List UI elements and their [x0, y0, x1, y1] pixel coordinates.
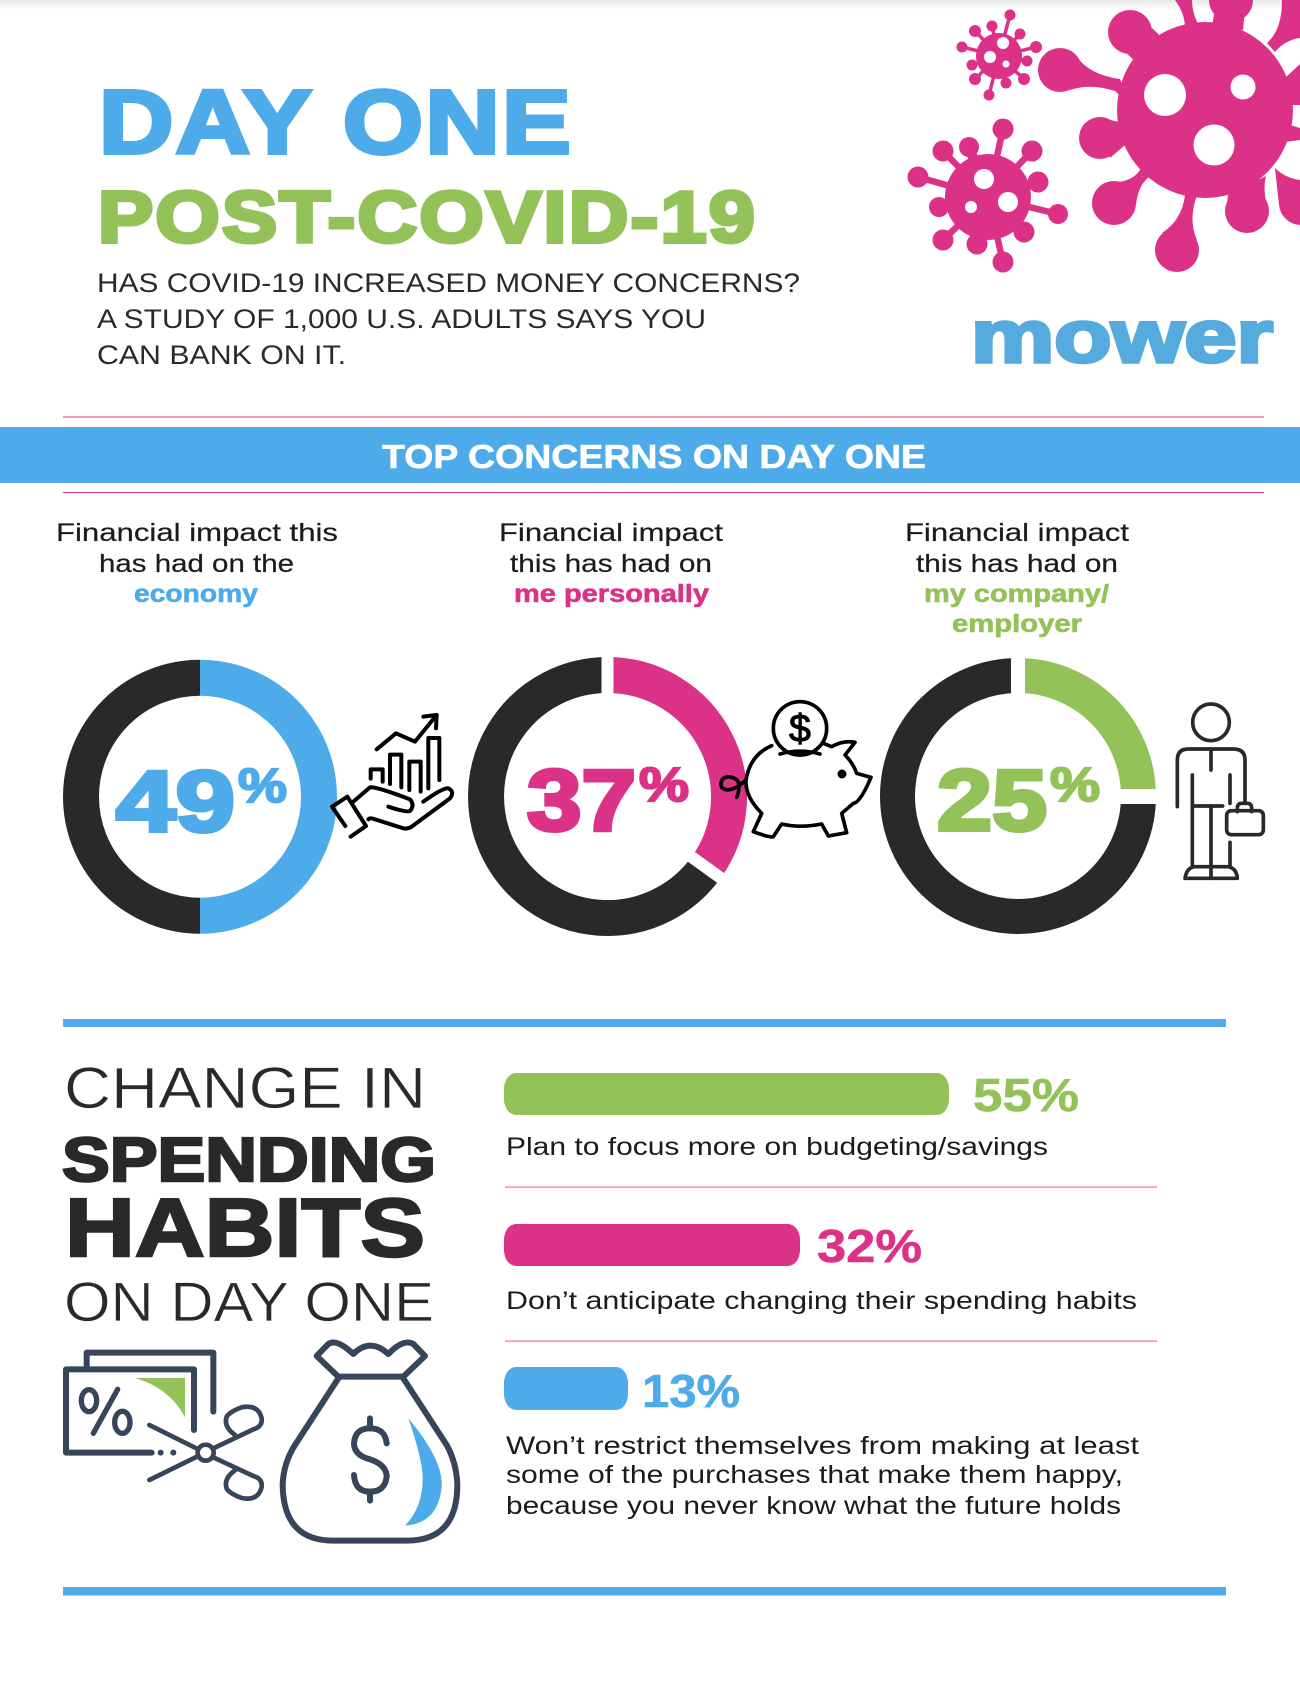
stat: 55% budgeting: Plan to focus more on budgeting/savings: [506, 1133, 1048, 1161]
text: employer label: Financial impact: [905, 519, 1129, 547]
icon: piggy bank: $: [789, 707, 811, 751]
section banner: top concerns: TOP CONCERNS ON DAY ONE: [382, 438, 926, 475]
logo: mower: mower: [971, 295, 1273, 378]
donut chart: 25%: 25: [937, 753, 1047, 849]
icon: piggy bank: [721, 702, 871, 837]
text: economy label: [56, 519, 338, 608]
divider: bottom of spending section: [63, 1587, 1226, 1596]
divider: top of spending section: [63, 1019, 1226, 1027]
text: personal label: Financial impact: [499, 519, 723, 547]
stat: 32% no change: 32%: [817, 1220, 922, 1272]
stat: 55% budgeting: [504, 1069, 1079, 1161]
text: personal label: this has had on: [510, 550, 712, 578]
icon: businessperson with briefcase: [1177, 704, 1263, 878]
donut chart: 37%: %: [639, 759, 689, 812]
text: economy label: Financial impact this: [56, 519, 338, 547]
heading: change in spending habits: ON DAY ONE: [64, 1270, 434, 1333]
icon: small virus top: [956, 10, 1042, 100]
text: employer label: [905, 519, 1129, 638]
donut chart: 49%: [81, 678, 319, 916]
text: personal label: me personally: [514, 580, 709, 608]
title: POST-COVID-19: [98, 178, 757, 258]
panel: employer concern: [898, 519, 1263, 916]
text: economy label: has had on the: [99, 550, 294, 578]
stat: 55% budgeting: 55%: [973, 1069, 1079, 1121]
subtitle: HAS COVID-19 INCREASED MONEY CONCERNS?: [97, 268, 800, 298]
stat: 13% no restriction: because you never know what the future holds: [506, 1492, 1121, 1520]
icon: money bag: [283, 1342, 457, 1541]
text: employer label: this has had on: [916, 550, 1118, 578]
icon: hand with growth chart: [332, 715, 452, 837]
heading: change in spending habits: SPENDING: [62, 1126, 436, 1195]
text: economy label: economy: [134, 580, 258, 608]
stat: 13% no restriction: [504, 1365, 1139, 1520]
donut chart: 37%: 37: [527, 753, 636, 849]
subtitle: CAN BANK ON IT.: [97, 340, 346, 370]
heading: change in spending habits: HABITS: [65, 1181, 425, 1274]
text: employer label: employer: [952, 610, 1082, 638]
heading: change in spending habits: CHANGE IN: [64, 1056, 426, 1121]
donut chart: 25%: %: [1050, 759, 1100, 812]
subtitle: A STUDY OF 1,000 U.S. ADULTS SAYS YOU: [97, 304, 706, 334]
title: DAY ONE: [99, 73, 573, 173]
text: employer label: my company/: [924, 580, 1109, 608]
donut chart: 49%: %: [238, 760, 287, 813]
stat: 32% no change: [504, 1220, 1137, 1315]
donut chart: 25%: [898, 640, 1170, 916]
donut chart: 49%: 49: [116, 754, 235, 850]
icon: coupon and scissors: [66, 1353, 262, 1499]
stat: 13% no restriction: some of the purchases that make them happy,: [506, 1461, 1123, 1489]
icon: medium virus: [908, 118, 1068, 272]
panel: economy concern: [56, 519, 452, 916]
heading: change in spending habits: [62, 1056, 436, 1333]
donut chart: 37%: [486, 640, 729, 918]
stat: 32% no change: Don’t anticipate changing their spending habits: [506, 1287, 1137, 1315]
section banner: top concerns: [0, 416, 1300, 493]
title: [98, 73, 757, 258]
stat: 13% no restriction: 13%: [642, 1365, 740, 1417]
stat: 13% no restriction: Won’t restrict themselves from making at least: [506, 1432, 1139, 1460]
icon: large virus: [1038, 0, 1300, 272]
panel: personal concern: [486, 519, 871, 918]
text: personal label: [499, 519, 723, 608]
subtitle: [97, 268, 800, 370]
